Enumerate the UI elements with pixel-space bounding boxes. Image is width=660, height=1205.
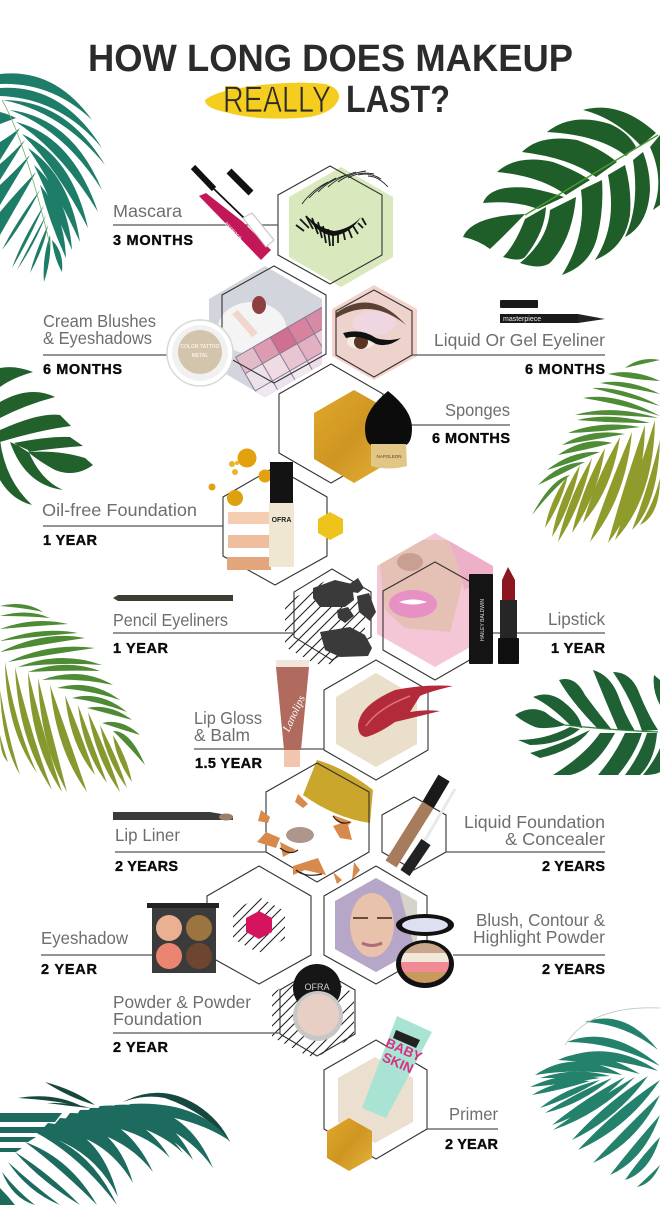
icon: magenta hexagon: [246, 911, 272, 939]
palm leaf: top left: [0, 73, 105, 282]
panel: liquid or gel eyeliner: Liquid Or Gel Eyeliner: [434, 330, 605, 350]
monstera leaf: top right: [463, 108, 660, 275]
panel: lipstick: [377, 533, 606, 680]
icon: crumbled bronzer: [257, 794, 360, 884]
panel: lip liner: Lip Liner: [115, 825, 180, 845]
panel: primer: [324, 1016, 499, 1171]
title: HOW LONG DOES MAKEUP: [88, 38, 573, 80]
monstera leaf: right lower: [515, 670, 660, 775]
panel: cream blushes and eyeshadows: Cream Blushes: [43, 311, 156, 331]
panel: oil-free foundation: 1 YEAR: [43, 533, 98, 549]
panel: primer: 2 YEAR: [445, 1137, 499, 1153]
panel: lipstick: 1 YEAR: [551, 641, 606, 657]
panel: mascara: Mascara: [113, 201, 182, 221]
icon: primer tube: [362, 1016, 432, 1118]
panel: lip gloss and balm: Lip Gloss: [194, 708, 262, 728]
panel: sponges: Sponges: [445, 400, 510, 420]
icon: foundation bottle and oil drops: OFRA: [272, 517, 291, 524]
palm leaf: lower left: [0, 604, 145, 792]
panel: lip liner: [113, 760, 373, 884]
panel: blush, contour and highlight powder: [324, 866, 605, 988]
panel: blush, contour and highlight powder: Blush, Contour &: [476, 910, 605, 930]
panel: cream blushes and eyeshadows: & Eyeshadows: [43, 328, 152, 348]
icon: compact powder: [396, 914, 454, 988]
panel: powder and powder foundation: 2 YEAR: [113, 1040, 169, 1056]
panel: powder and powder foundation: [113, 964, 360, 1056]
icon: eyeliner pens: masterpiece: [503, 316, 541, 323]
panel: cream blushes and eyeshadows: [43, 265, 327, 397]
icon: cream eyeshadow pot: METAL: [192, 353, 208, 359]
icon: loose powder jar: OFRA: [304, 982, 330, 992]
title: LAST?: [346, 79, 450, 121]
title: [88, 38, 573, 121]
palm leaf: bottom left: [0, 1082, 230, 1205]
panel: liquid foundation and concealer: & Concealer: [505, 829, 605, 849]
icon: charcoal lumps: [313, 578, 376, 657]
icon: red gloss smear: [358, 686, 453, 737]
panel: powder and powder foundation: Foundation: [113, 1009, 202, 1029]
panel: pencil eyeliners: 1 YEAR: [113, 641, 169, 657]
highlight: yellow brush stroke: [205, 83, 339, 119]
panel: primer: Primer: [449, 1104, 498, 1124]
panel: eyeshadow: Eyeshadow: [41, 928, 128, 948]
panel: sponges: 6 MONTHS: [432, 431, 510, 447]
panel: sponges: [279, 364, 510, 483]
title: REALLY: [223, 79, 331, 120]
panel: liquid foundation and concealer: Liquid Foundation: [464, 812, 605, 832]
icon: loose powder jar: [293, 964, 343, 1041]
panel: mascara: [113, 166, 393, 287]
panel: lip liner: 2 YEARS: [115, 859, 178, 875]
palm leaf: right middle: [532, 359, 660, 543]
panel: liquid or gel eyeliner: 6 MONTHS: [525, 362, 605, 378]
panel: oil-free foundation: [42, 448, 343, 585]
icon: black sponge: NAPOLEON: [376, 454, 402, 459]
panel: eyeshadow: [41, 866, 311, 984]
panel: blush, contour and highlight powder: Highlight Powder: [473, 927, 605, 947]
icon: lipstick and box: HAILEY BALDWIN: [480, 599, 486, 641]
icon: concealer tube and wand: [391, 778, 455, 873]
palm leaf: bottom right: [530, 1008, 660, 1187]
panel: lip gloss and balm: [194, 660, 453, 780]
panel: blush, contour and highlight powder: 2 YEARS: [542, 962, 605, 978]
icon: false lashes: [296, 216, 366, 246]
icon: primer tube: SKIN: [380, 1049, 416, 1076]
icon: cream eyeshadow pot: COLOR TATTOO: [180, 344, 220, 350]
icon: eyeshadow palette: [147, 903, 219, 973]
panel: liquid or gel eyeliner: [332, 285, 605, 380]
icon: cream eyeshadow pot: [167, 320, 233, 386]
panel: pencil eyeliners: [113, 569, 376, 664]
panel: lip gloss and balm: & Balm: [194, 725, 250, 745]
icon: mascara and tube: essence: [223, 221, 243, 242]
monstera leaf: left middle: [0, 367, 93, 505]
panel: pencil eyeliners: Pencil Eyeliners: [113, 610, 228, 630]
panel: cream blushes and eyeshadows: 6 MONTHS: [43, 362, 122, 378]
icon: black sponge: [365, 391, 412, 468]
icon: mascara and tube: [193, 167, 274, 260]
panel: liquid foundation and concealer: 2 YEARS: [542, 859, 605, 875]
icon: eyeliner pencil: [113, 595, 233, 601]
icon: foundation bottle and oil drops: [208, 448, 294, 567]
panel: lip gloss and balm: 1.5 YEAR: [195, 756, 263, 772]
icon: lip liner pencil: [113, 812, 233, 820]
icon: lipstick and box: [469, 567, 519, 664]
panel: liquid foundation and concealer: [382, 778, 605, 875]
icon: eyeliner pens: [500, 300, 605, 323]
panel: eyeshadow: 2 YEAR: [41, 962, 98, 978]
icon: lip gloss tube: [276, 660, 309, 767]
panel: oil-free foundation: Oil-free Foundation: [42, 500, 197, 520]
icon: lip gloss tube: Lanolips: [280, 694, 308, 735]
panel: mascara: 3 MONTHS: [113, 233, 193, 249]
icon: primer tube: BABY: [383, 1035, 424, 1065]
panel: lipstick: Lipstick: [548, 609, 605, 629]
panel: powder and powder foundation: Powder & Powder: [113, 992, 251, 1012]
